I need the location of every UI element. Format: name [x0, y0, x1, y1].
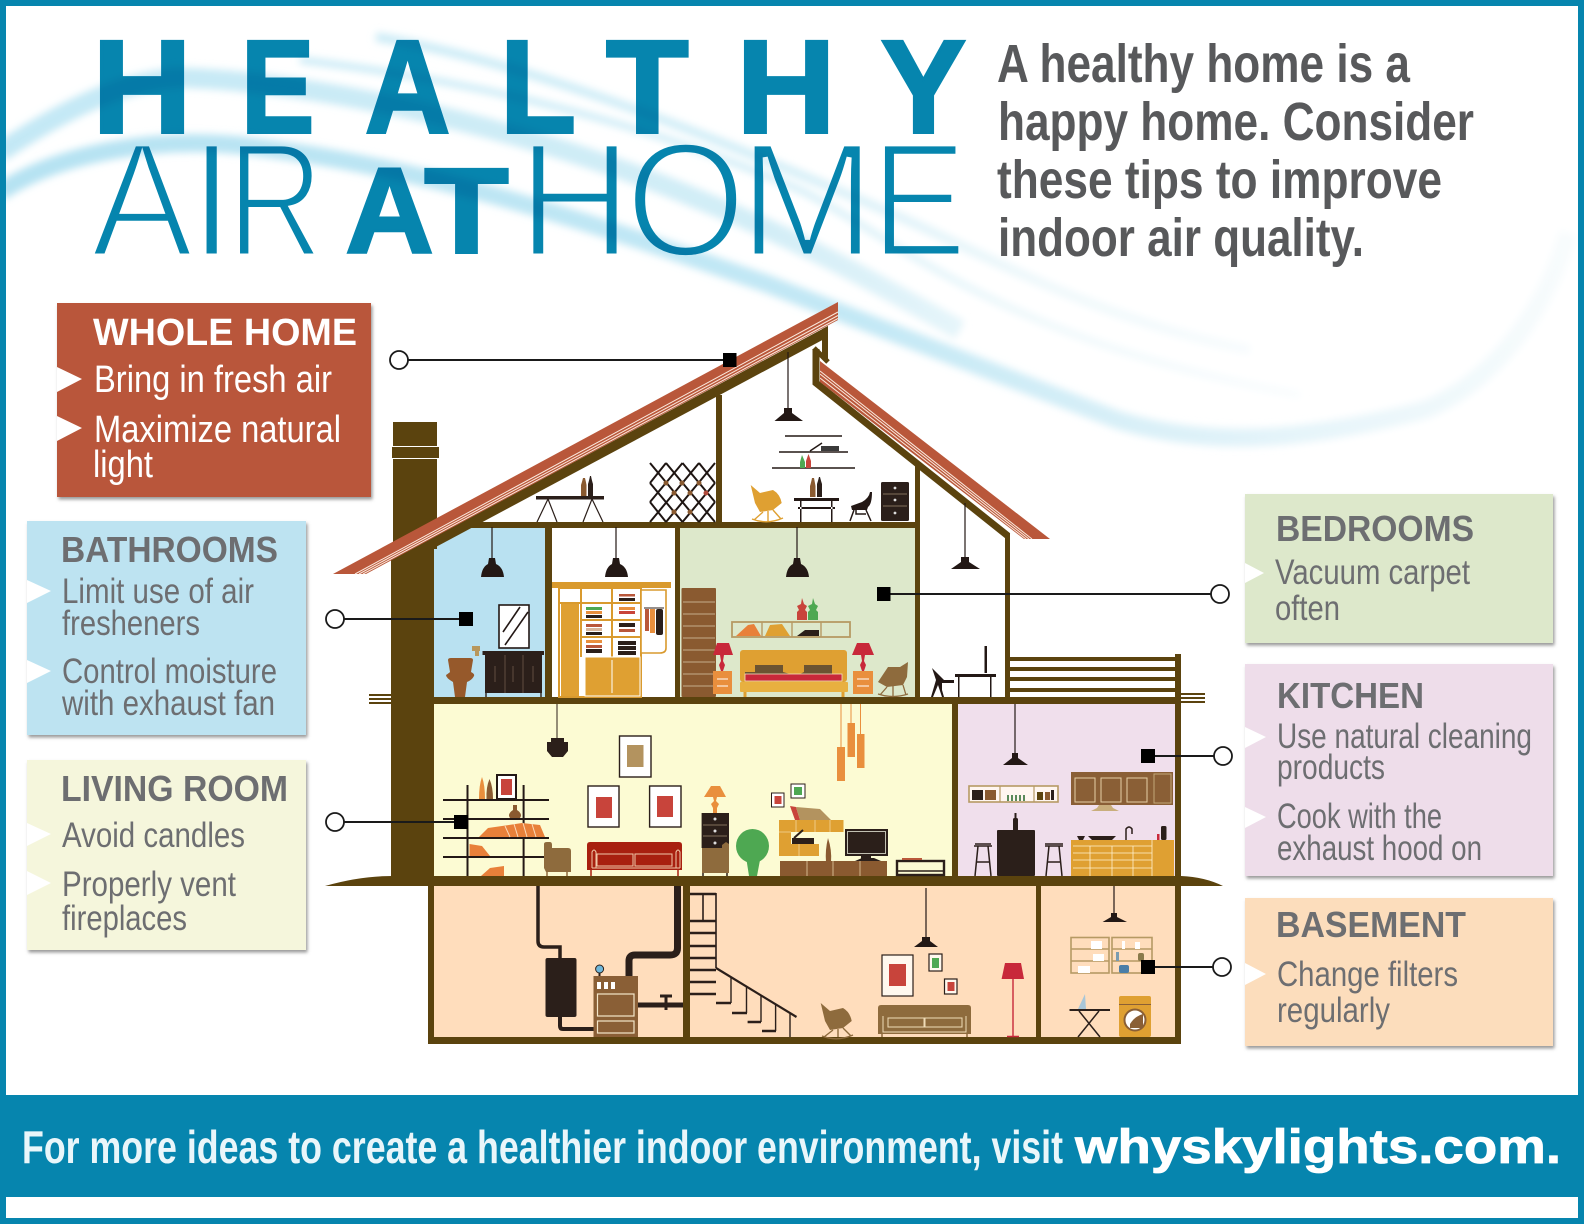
desk by window [931, 646, 996, 697]
tips [61, 572, 277, 723]
title: Healthy Air at Home: R [227, 108, 324, 291]
title: Healthy Air at Home: I [189, 108, 234, 291]
tips: fireplaces [62, 899, 187, 938]
living room pendant [547, 704, 568, 757]
floor lamp [1002, 963, 1024, 1036]
intro text: A healthy home is a [997, 34, 1411, 94]
title: Healthy Air at Home: M [739, 109, 876, 291]
title: Healthy Air at Home: A [345, 143, 434, 279]
background air swoosh [0, 37, 1568, 438]
basement lamp [914, 888, 938, 947]
potted tree [736, 829, 769, 876]
attic furniture right: lamp, shelves, chair, table, dresser [751, 352, 909, 522]
tips [62, 816, 245, 938]
tips [93, 359, 341, 486]
arrow marker [1245, 563, 1264, 583]
tips: often [1275, 589, 1340, 628]
pendant lamps second floor [481, 503, 980, 577]
arrow marker [1245, 963, 1266, 985]
connector: bedrooms [877, 585, 1229, 603]
room fills [434, 527, 1175, 1037]
basement rocking chair [821, 1003, 853, 1039]
footer url: whyskylights.com. [1074, 1121, 1561, 1174]
panel: kitchen [1245, 664, 1553, 876]
living room orange pendants [837, 704, 864, 781]
connector: living room [326, 813, 468, 831]
intro text: indoor air quality. [998, 208, 1364, 268]
title: Healthy Air at Home: T [606, 14, 689, 161]
kitchen wall shelf [969, 786, 1058, 802]
bathroom furniture [446, 605, 544, 697]
basement pipes and water heater [538, 886, 683, 1029]
living room wall pictures [588, 736, 681, 827]
intro text: happy home. Consider [998, 92, 1474, 152]
kitchen pendant lamp [1003, 704, 1028, 765]
footer banner [0, 1095, 1584, 1197]
connector: basement [1141, 958, 1231, 976]
panel: living room [27, 760, 306, 950]
title: Healthy Air at Home: O [626, 108, 746, 291]
tips: Properly vent [62, 865, 236, 904]
arrow markers [1245, 727, 1266, 828]
furnace [594, 965, 638, 1037]
title: Healthy Air at Home: E [241, 13, 314, 161]
panel: bedrooms [1245, 494, 1553, 643]
title: Healthy Air at Home: A [91, 109, 194, 291]
tips: Cook with the [1277, 797, 1442, 836]
tips: Bring in fresh air [94, 359, 332, 401]
kitchen upper cabinet and hood [1071, 772, 1173, 811]
title: Healthy Air at Home [91, 12, 967, 291]
attic furniture left: table, bottles, wine rack [536, 463, 715, 522]
footer message: For more ideas to create a healthier indoor environment, visit [22, 1121, 1063, 1173]
red sofa [587, 842, 682, 876]
tips: light [93, 444, 153, 486]
yellow bookcase [779, 806, 844, 856]
washing machine [1119, 996, 1151, 1037]
tips [1275, 553, 1470, 628]
heading: BASEMENT [1276, 904, 1466, 945]
ironing board and iron [1070, 994, 1110, 1037]
connector: whole home [390, 351, 736, 369]
heading: WHOLE HOME [93, 312, 357, 354]
tips: Limit use of air [62, 572, 254, 611]
tips: with exhaust fan [61, 684, 275, 723]
tips [1277, 955, 1458, 1030]
tips: regularly [1277, 991, 1390, 1030]
connector: bathrooms [326, 610, 473, 628]
intro text: these tips to improve [997, 150, 1442, 210]
house frame [325, 326, 1223, 1044]
lamp and drawers with armchair [702, 786, 729, 876]
tips: Maximize natural [94, 409, 341, 451]
title: Healthy Air at Home: A [365, 12, 450, 161]
living room bookshelf [443, 775, 549, 876]
title: Healthy Air at Home: T [424, 143, 509, 279]
tips: products [1277, 748, 1385, 787]
title: Healthy Air at Home: E [871, 108, 967, 291]
small living room pictures [772, 784, 805, 807]
heading: BEDROOMS [1276, 508, 1474, 549]
basement pictures [882, 954, 957, 996]
panel: bathrooms [27, 521, 306, 735]
left armchair [544, 842, 571, 876]
tips: Change filters [1277, 955, 1458, 994]
intro text [997, 34, 1474, 268]
tips: Control moisture [62, 652, 277, 691]
connector: kitchen [1141, 747, 1232, 765]
panel: whole home [57, 303, 371, 497]
title: Healthy Air at Home: L [500, 14, 576, 161]
tips [1277, 717, 1532, 868]
ladder and staircase [690, 893, 796, 1037]
closet [552, 582, 671, 697]
tips: Avoid candles [62, 816, 245, 855]
title: Healthy Air at Home: Y [881, 12, 966, 161]
kitchen counter [1071, 826, 1174, 876]
left roof [333, 302, 838, 574]
tips: Vacuum carpet [1275, 553, 1470, 592]
tips: exhaust hood on [1277, 829, 1482, 868]
heading: LIVING ROOM [61, 768, 288, 809]
right roof [820, 361, 1050, 539]
fridge and stools [974, 813, 1063, 876]
tips: fresheners [62, 604, 200, 643]
title: Healthy Air at Home: H [92, 13, 192, 161]
title: Healthy Air at Home: H [736, 13, 836, 161]
callout connectors [326, 351, 1232, 976]
laundry shelves [1071, 938, 1152, 973]
heading: KITCHEN [1277, 675, 1424, 716]
arrow markers [27, 823, 51, 895]
title: Healthy Air at Home: H [518, 109, 632, 291]
arrow markers [27, 580, 51, 683]
laundry lamp [1103, 886, 1127, 922]
heading: BATHROOMS [61, 529, 278, 570]
house illustration [325, 302, 1223, 1044]
arrow markers [57, 367, 82, 441]
television and console [780, 829, 944, 876]
panel: basement [1245, 898, 1553, 1046]
basement sofa [878, 1005, 971, 1037]
bedroom furniture [682, 588, 908, 697]
